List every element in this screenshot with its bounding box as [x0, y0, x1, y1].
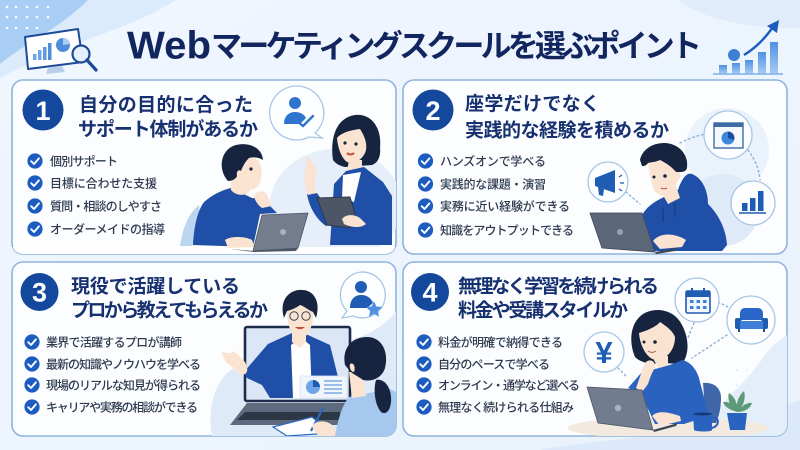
- icon: growth chart with arrow: [713, 20, 783, 74]
- man at laptop: [193, 144, 277, 248]
- checklist 1: 質問・相談のしやすさ: [50, 198, 162, 214]
- number badge 3: 3: [32, 278, 47, 308]
- heading 2: 座学だけでなく: [465, 92, 600, 115]
- heading 1: サポート体制があるか: [78, 118, 258, 140]
- panel: point 2: [403, 80, 787, 254]
- icon circle: yen: ¥: [595, 335, 613, 370]
- heading 4: 料金や受講スタイルか: [458, 298, 628, 322]
- heading 2: 実践的な経験を積めるか: [465, 120, 669, 142]
- heading 1: [78, 94, 258, 140]
- checklist 1: [27, 153, 165, 237]
- icon circle: megaphone: [588, 162, 628, 202]
- number badge 2: 2: [425, 96, 441, 126]
- illustration: woman studying at home: [568, 278, 787, 439]
- number badge 4: 4: [422, 278, 438, 308]
- notebook and hand: [273, 408, 338, 436]
- laptop: [587, 387, 678, 432]
- icon circle: sofa: [727, 296, 775, 344]
- panel: point 3: [12, 262, 396, 436]
- laptop with screen: [230, 327, 352, 425]
- checklist 1: 目標に合わせた支援: [50, 176, 157, 190]
- checklist 3: [24, 334, 201, 415]
- checklist 2: 知識をアウトプットできる: [440, 222, 574, 238]
- checklist 3: 業界で活躍するプロが講師: [46, 334, 182, 350]
- checklist 2: 実践的な課題・演習: [440, 176, 546, 192]
- illustration: man and woman mentor: [13, 86, 402, 261]
- potted plant: [723, 391, 752, 430]
- checklist 4: オンライン・通学など選べる: [438, 378, 580, 392]
- student from behind: [335, 337, 396, 436]
- icon: analytics monitor with magnifier: [25, 29, 96, 74]
- laptop: [590, 213, 678, 254]
- instructor: [222, 290, 338, 398]
- icon circle: yen: [584, 332, 624, 372]
- checklist 3: キャリアや実務の相談ができる: [46, 400, 198, 414]
- heading 3: 現役で活躍している: [71, 276, 240, 298]
- checklist 3: 現場のリアルな知見が得られる: [46, 378, 201, 392]
- number badge 3: [20, 273, 58, 311]
- mug: [693, 412, 718, 432]
- panel: point 4: [403, 262, 787, 439]
- heading 3: プロから教えてもらえるか: [71, 300, 268, 322]
- checklist 2: 実務に近い経験ができる: [440, 198, 570, 214]
- number badge 4: [411, 273, 449, 311]
- heading 2: [465, 92, 669, 142]
- number badge 2: [412, 90, 454, 130]
- checklist 2: [418, 153, 574, 238]
- number badge 1: 1: [35, 96, 51, 126]
- checklist 1: 個別サポート: [50, 154, 118, 168]
- woman with clipboard: [304, 115, 392, 245]
- icon circle: dashboard window: [704, 111, 752, 159]
- heading 3: [71, 276, 268, 322]
- icon circle: bar chart: [731, 181, 775, 225]
- woman at laptop: [628, 310, 709, 426]
- title: Web: [127, 24, 211, 68]
- slide card: [300, 376, 347, 398]
- laptop: [230, 213, 308, 252]
- man in hoodie: [640, 143, 727, 251]
- checklist 4: 自分のペースで学べる: [438, 356, 550, 372]
- icon circle: calendar: [675, 278, 719, 322]
- heading 4: [458, 274, 659, 322]
- number badge 1: [22, 90, 64, 130]
- checklist 3: 最新の知識やノウハウを学べる: [46, 356, 201, 372]
- heading 1: 自分の目的に合った: [79, 94, 253, 116]
- heading 4: 無理なく学習を続けられる: [458, 274, 659, 298]
- illustration: online instructor: [210, 272, 396, 436]
- panel: point 1: [12, 80, 402, 261]
- checklist 1: オーダーメイドの指導: [50, 222, 165, 236]
- illustration: hoodie learner: [588, 108, 775, 254]
- speech bubble: person check: [270, 86, 324, 140]
- checklist 2: ハンズオンで学べる: [440, 154, 546, 168]
- checklist 4: 無理なく続けられる仕組み: [438, 400, 574, 414]
- title: japanese part: マーケティングスクールを選ぶポイント: [211, 29, 702, 64]
- checklist 4: 料金が明確で納得できる: [438, 334, 563, 350]
- chair: [703, 383, 721, 423]
- checklist 4: [416, 334, 580, 415]
- speech bubble: expert star: [340, 272, 385, 318]
